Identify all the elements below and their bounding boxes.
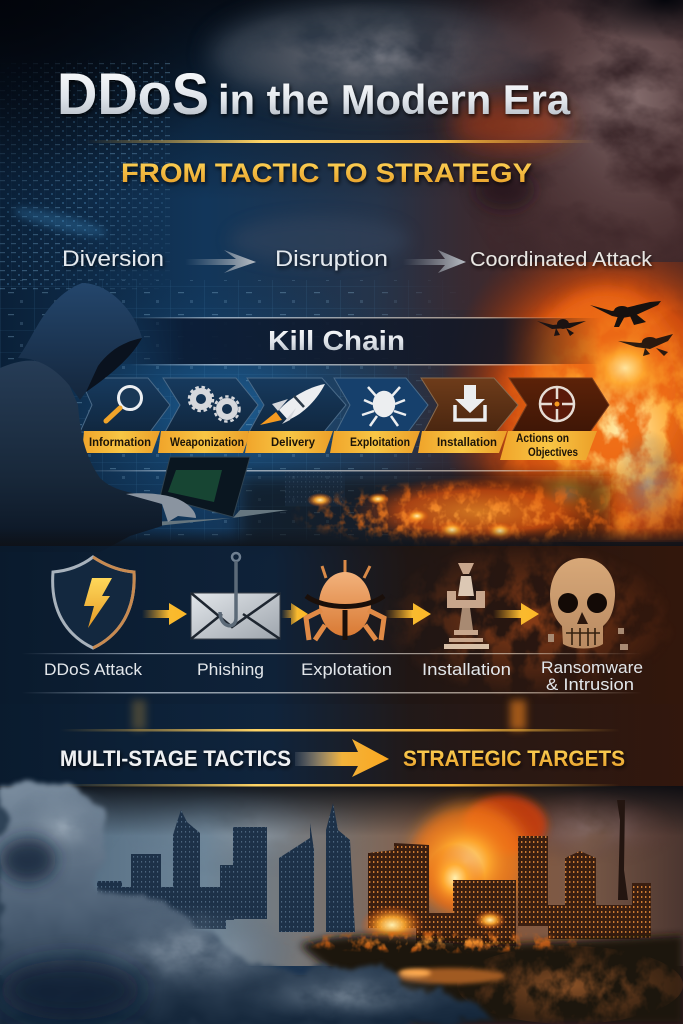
data wall upper left: [0, 60, 170, 290]
fire: explosion on the right side: [430, 262, 683, 542]
label: explotation: Explotation: [301, 660, 392, 679]
icon: skull: [548, 558, 628, 650]
arrow: [385, 603, 431, 625]
stage: exploitation: Exploitation: [350, 437, 410, 449]
stage: actions on objectives: Actions on: [516, 433, 569, 445]
banner: kill chain heading: [110, 317, 600, 366]
icon: download: [455, 385, 485, 420]
ground: trees and river: [280, 930, 683, 1024]
stage: information: Information: [89, 437, 151, 449]
arrow: [142, 603, 187, 625]
divider lines: [22, 653, 642, 654]
stage: delivery: [245, 378, 346, 453]
icon: rocket: [260, 384, 325, 425]
title: in the Modern Era: [218, 76, 571, 123]
kill chain: six chevron stages: [80, 378, 610, 472]
arrow: [295, 739, 389, 777]
stage: installation: Installation: [437, 437, 497, 449]
icon: shield with lightning: [53, 557, 134, 648]
drone: [537, 319, 586, 336]
label: multi-stage tactics: MULTI-STAGE TACTICS: [60, 746, 291, 771]
flow step: disruption: Disruption: [275, 246, 388, 271]
skyline: burning city: [0, 786, 683, 966]
icon: crosshair target: [540, 387, 574, 421]
icon: orange bug: [306, 560, 384, 640]
label: phishing: Phishing: [197, 660, 264, 679]
burning towers: [368, 836, 651, 950]
title: [57, 62, 571, 127]
icon: gears: [189, 387, 240, 422]
icon: chess-like installation tower: [444, 563, 489, 649]
stage: exploitation: [330, 378, 428, 453]
icon: laptop: [147, 457, 288, 527]
fire behind buildings: [405, 795, 547, 917]
label: ransomware and intrusion: & Intrusion: [546, 675, 634, 694]
stage: delivery: Delivery: [271, 437, 316, 449]
flow: diversion to coordinated attack: [62, 246, 653, 273]
title underline: [85, 140, 595, 143]
flow step: diversion: Diversion: [62, 246, 164, 271]
title: DDoS: [57, 62, 209, 127]
arrow: [493, 603, 539, 625]
subtitle: FROM TACTIC TO STRATEGY: [121, 158, 532, 188]
flow step: coordinated attack: Coordinated Attack: [470, 249, 653, 271]
stage: information: [80, 378, 170, 453]
smoke: foreground clouds: [0, 784, 495, 1024]
label: installation: Installation: [422, 660, 511, 679]
banner: kill chain heading: Kill Chain: [268, 325, 405, 356]
icon: magnifier: [106, 386, 142, 421]
label: ddos attack: DDoS Attack: [44, 660, 143, 679]
stage: installation: [418, 378, 518, 453]
drone: [618, 334, 673, 356]
label: ransomware and intrusion: Ransomware: [541, 658, 643, 677]
burning city band: [240, 472, 650, 551]
stage: actions on objectives: Objectives: [528, 447, 578, 459]
stage: actions on objectives: [500, 378, 609, 460]
panel: attack path band: [0, 528, 683, 790]
blue towers: [97, 803, 355, 932]
label: strategic targets: STRATEGIC TARGETS: [403, 746, 625, 771]
drone: [590, 301, 661, 327]
tower mast: [617, 800, 628, 900]
label: ransomware and intrusion: [541, 658, 643, 694]
stage: weaponization: [158, 378, 258, 453]
attack path row: [22, 553, 643, 694]
banner: multi-stage tactics to strategic targets: [60, 729, 625, 786]
icon: spider bug: [362, 387, 406, 426]
stage: weaponization: Weaponization: [170, 437, 244, 449]
hacker: hooded figure at laptop: [0, 283, 288, 552]
icon: envelope with hook: [191, 553, 280, 639]
arrow: [403, 250, 466, 273]
icon: drones: [537, 301, 673, 356]
arrow: [281, 603, 308, 625]
lower fire: [360, 905, 424, 945]
arrow: [185, 250, 256, 273]
